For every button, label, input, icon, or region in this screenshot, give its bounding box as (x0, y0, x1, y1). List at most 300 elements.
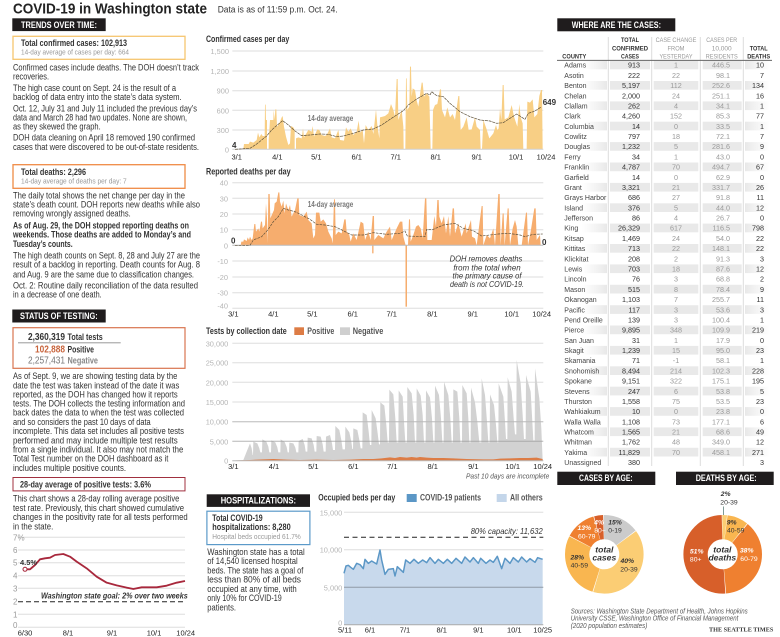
table: county data: 18 (672, 132, 680, 141)
table: county data: 75 (672, 397, 680, 406)
donut labels: cases: cases (592, 553, 616, 563)
table: county data: 4 (674, 214, 678, 223)
text: rate notes: in the state. (13, 521, 53, 531)
deaths bars (235, 192, 541, 307)
text: case notes: The high case count on Sept. 24 is the result of a (13, 83, 176, 93)
table: county data: 4,260 (622, 112, 640, 121)
table: county data: Stevens (564, 389, 590, 396)
chart title: Reported deaths per day (206, 166, 291, 176)
table: county data (557, 37, 772, 467)
text: testing notes: date the test was taken instead of the date it was (13, 380, 180, 390)
table: county data: 271 (752, 448, 764, 457)
table: county data: 494.7 (712, 163, 730, 172)
chart: reported deaths per day: 8/1 (427, 310, 438, 319)
chart: confirmed cases per day: 5/1 (311, 152, 322, 161)
chart: reported deaths per day: 0 (231, 236, 236, 246)
text: testing notes: from a single individual. It also may not match the (13, 444, 183, 454)
donut: cases by age (577, 527, 631, 581)
table: county data: 713 (628, 244, 640, 253)
table: county data: 54.0 (716, 234, 730, 243)
chart: reported deaths per day (206, 166, 551, 319)
table: county data: Thurston (564, 399, 592, 406)
chart: tests by collection date: 4/1 (269, 462, 279, 471)
table: county data: Grant (564, 185, 582, 192)
table: county data: 34 (632, 152, 640, 161)
table: county data: 31 (632, 336, 640, 345)
callout: total hospitalizations (207, 511, 310, 545)
table: county data: 458.1 (712, 448, 730, 457)
table: county data: 27 (672, 193, 680, 202)
table: county data: 26 (756, 183, 764, 192)
chart: tests by collection date: 25,000 (206, 359, 228, 368)
table: county data: 8,494 (622, 366, 640, 375)
chart: tests by collection date: 6/1 (348, 462, 359, 471)
table: county data: 12 (756, 203, 764, 212)
text: death notes: result of a backlog in reporting. Death counts for Aug. 8 (13, 260, 200, 270)
heading: cases by age: CASES BY AGE: (579, 473, 633, 484)
callout: 28-day average (13, 478, 185, 491)
donut labels: cases: 15% (608, 519, 622, 526)
text: hospital notes: occupied at any time, with (207, 584, 297, 594)
chart: reported deaths per day: 6/1 (347, 310, 358, 319)
chart title: Confirmed cases per day (206, 34, 289, 44)
table: county data: Adams (564, 63, 587, 70)
heading: hospitalizations: HOSPITALIZATIONS: (221, 496, 296, 506)
table: county data: Snohomish (564, 368, 599, 375)
panel: where are the cases (557, 18, 772, 467)
table: county data: 10 (756, 61, 764, 70)
table: county data: 219 (752, 326, 764, 335)
text: case notes: recoveries. (13, 72, 49, 82)
table: county data: 5,197 (622, 81, 640, 90)
chart: reported deaths per day: -30 (217, 289, 228, 298)
text: testing notes: reported, as the DOH has changed how it reports (13, 389, 178, 399)
table: county data: 34.1 (716, 102, 730, 110)
table: county data: 228 (752, 366, 764, 375)
table: county data: 134 (752, 81, 764, 90)
table: county data: 251.1 (712, 91, 730, 100)
chart: confirmed cases per day: 4 (232, 141, 237, 150)
table: county data: 0 (760, 214, 764, 223)
donut labels: deaths (690, 491, 758, 564)
table: county data: 33.5 (716, 122, 730, 131)
table: county data: Skagit (564, 348, 584, 355)
chart: tests by collection date: 10,000 (206, 418, 228, 427)
text: death notes: Oct. 2: Routine daily reconciliation of the data resulted (13, 280, 198, 290)
table: county data: 8 (674, 285, 678, 294)
table: county data: 1,558 (622, 397, 640, 406)
text: death notes: and Aug. 9 are the same due to classification changes. (13, 269, 194, 279)
table: county data: 7 (760, 132, 764, 141)
chart: tests by collection date (206, 326, 552, 481)
table: county data: 68.6 (716, 428, 730, 436)
callout: test totals: 2,360,319 (28, 332, 65, 343)
note: past 10 days: Past 10 days are incomplete (466, 472, 549, 481)
table: county data: 3 (760, 254, 764, 263)
data timestamp: Data is as of 11:59 p.m. Oct. 24. (218, 4, 338, 14)
table: county data: 22 (672, 71, 680, 80)
text: case notes: Oct. 12, July 31 and July 11 included the previous day’s (13, 104, 197, 114)
table: county data: 71 (632, 356, 640, 365)
panel: hospitalizations (207, 493, 552, 635)
table: county data: Pierce (564, 328, 584, 335)
chart: reported deaths per day: -20 (217, 273, 228, 282)
table: county data: 95.0 (716, 346, 730, 355)
callout: total hospitalizations: hospitalizations: 8,280 (212, 522, 291, 532)
table: county data: 102.3 (712, 366, 730, 375)
donut labels: cases (569, 519, 638, 574)
table: county data: 3 (674, 275, 678, 284)
table: county data: 148.1 (712, 244, 730, 253)
chart: tests by collection date: 20,000 (206, 378, 228, 387)
table: county data: 87.6 (716, 264, 730, 274)
table: county data: 3 (760, 305, 764, 314)
table: county data: Mason (564, 287, 585, 294)
chart: tests by collection date: 5,000 (210, 437, 228, 446)
text: testing notes: Total Test number on the DOH dashboard as it (13, 454, 169, 464)
table: county data: 26,329 (618, 224, 640, 233)
table: county data: Cowlitz (564, 134, 587, 141)
callout: total hospitalizations: Total COVID-19 (212, 513, 263, 523)
text: hospital notes (207, 547, 305, 612)
table: county data: 12 (756, 264, 764, 274)
chart: positive test rate: 2 (13, 598, 18, 607)
text: death notes: The high death counts on Sept. 8, 28 and July 27 are the (13, 250, 200, 260)
table: county data: Pend Oreille (564, 318, 603, 324)
text: rate notes: This chart shows a 28-day rolling average positive (13, 494, 179, 504)
table: county data: 255.7 (712, 295, 730, 304)
table: county data: 11,829 (619, 448, 640, 457)
legend: Positive (307, 326, 334, 336)
table: county data: 4,787 (622, 163, 640, 172)
14-day average line (235, 92, 541, 149)
chart: confirmed cases per day (206, 34, 557, 161)
chart: occupied beds per day: 0 (338, 618, 342, 628)
chart: occupied beds per day: 5,000 (324, 583, 342, 592)
table: county data: 24 (672, 234, 680, 243)
text: hospital notes: Washington state has a total (207, 547, 305, 557)
chart: confirmed cases per day: 14-day average (308, 114, 354, 123)
chart: confirmed cases per day: 3/1 (231, 152, 242, 161)
chart: positive test rate: 3 (13, 584, 18, 593)
text: case notes: cases that were discovered to be out-of-state residents. (13, 142, 199, 152)
chart: positive test rate: 4 (13, 572, 18, 581)
text: testing notes: back dates the data to when the test was collected (13, 408, 184, 418)
table: county data: 23.8 (716, 407, 730, 416)
table: county data: Island (564, 205, 583, 212)
table: county data: 7 (760, 71, 764, 80)
legend: Negative (353, 326, 383, 336)
table: county data: 22 (672, 244, 680, 253)
callout: 28-day average: 3.6% (134, 479, 151, 490)
donut labels: deaths: 9% (727, 519, 737, 526)
table: county data: 322 (670, 377, 682, 386)
table: county data: 2 (674, 254, 678, 263)
chart: confirmed cases per day: 1,500 (210, 47, 229, 56)
table: county data: 380 (628, 458, 640, 467)
table: county data: Whatcom (564, 430, 594, 436)
table: county data: Lewis (564, 266, 583, 274)
table: county data: 53.8 (716, 387, 730, 396)
donut labels: deaths: 60-79 (740, 556, 758, 563)
chart: reported deaths per day: 30 (220, 194, 228, 203)
donut labels: deaths: 80+ (690, 557, 701, 564)
donut labels: cases: 28% (569, 554, 584, 561)
text: death notes (12, 191, 200, 299)
table: county data: 10 (632, 407, 640, 416)
table: county data: 7 (674, 295, 678, 304)
table: county data: 77 (756, 112, 764, 121)
chart: tests by collection date: 8/1 (427, 462, 438, 471)
donut labels: cases: 40-59 (571, 562, 588, 569)
table: county data: FROM (668, 46, 684, 52)
table: county data: 72.1 (716, 132, 730, 141)
table: county data: DEATHS (747, 54, 771, 60)
table: county data: 0 (760, 152, 764, 161)
table: county data: 100.4 (712, 316, 730, 324)
table: county data: 376 (628, 203, 640, 212)
chart: positive test rate: 5 (13, 559, 18, 568)
text: testing notes: tests. The DOH collects the testing information and (13, 399, 185, 409)
table: county data: CONFIRMED (612, 46, 648, 52)
table: county data: Chelan (564, 93, 587, 100)
table: county data: 0 (674, 122, 678, 131)
table: county data: 1,565 (622, 428, 640, 436)
table: county data: 798 (752, 224, 764, 233)
chart: reported deaths per day: 0 (224, 241, 228, 250)
table: county data: Ferry (564, 154, 581, 161)
donut labels: deaths: total (713, 544, 732, 554)
donut labels: cases: 0-19 (608, 528, 622, 535)
table: county data: Whitman (564, 440, 592, 447)
text: testing notes (13, 371, 185, 473)
table: county data: Clallam (564, 104, 588, 110)
chart: reported deaths per day: 40 (220, 179, 228, 188)
chart: positive test rate: 7% (13, 533, 25, 542)
table: county data: Okanogan (564, 297, 597, 304)
negative tests bars (232, 360, 543, 461)
table: county data: 23 (756, 346, 764, 355)
table: county data: Douglas (564, 144, 590, 151)
table: county data: San Juan (564, 338, 594, 345)
panel: status of testing (12, 310, 195, 637)
table: county data: 222 (628, 71, 640, 80)
table: county data: Spokane (564, 379, 592, 386)
chart: confirmed cases per day: 7/1 (390, 152, 401, 161)
table: county data: 76 (632, 275, 640, 284)
panel: trends over time (12, 18, 200, 299)
chart: positive test rate: 1 (13, 610, 18, 619)
table: county data: 6 (760, 417, 764, 426)
table: county data: 112 (670, 81, 682, 90)
table: county data: 446.5 (712, 61, 730, 70)
donut labels: deaths: 2% (720, 491, 731, 498)
table: county data: 1 (674, 152, 678, 161)
table: county data: 177.1 (712, 417, 730, 426)
table: county data: TOTAL (750, 46, 768, 52)
chart: occupied beds per day: 15,000 (320, 508, 342, 517)
table: county data: Skamania (564, 358, 596, 365)
table: county data: 0 (674, 173, 678, 182)
donut: deaths by age (696, 527, 750, 581)
text: case notes: Confirmed cases include deaths. The DOH doesn’t track (13, 62, 199, 72)
chart: tests by collection date: 3/1 (228, 462, 239, 471)
heading: where are the cases (557, 18, 675, 31)
text: rate notes: test rate. Previously, this chart showed cumulative (13, 503, 184, 513)
table: county data: 14 (632, 122, 640, 131)
table: county data: 703 (628, 264, 640, 274)
table: county data: COUNTY (562, 54, 587, 60)
table: county data: 85.3 (716, 112, 730, 121)
table: county data: RESIDENTS (706, 54, 738, 60)
legend: All others (510, 493, 543, 503)
text: death notes: weekends. Those deaths are added to Monday’s and (12, 230, 191, 240)
table: county data: 0 (760, 407, 764, 416)
callout: test totals: Positive (68, 345, 94, 355)
chart: positive test rate: 0 (13, 621, 18, 630)
table: county data: 2 (760, 275, 764, 284)
text: hospital notes: beds. The state has a goal of (207, 565, 304, 575)
chart: tests by collection date: 30,000 (206, 339, 228, 348)
table: county data: 617 (670, 224, 682, 233)
chart: occupied beds per day (318, 493, 552, 635)
table: county data: 152 (670, 112, 682, 121)
table: county data: 70 (672, 448, 680, 457)
text: case notes: data and March 28 had two updates. None are shown, (13, 113, 187, 123)
table: county data: 70 (672, 163, 680, 172)
table: county data: YESTERDAY (660, 54, 693, 60)
table: county data: CASES (621, 54, 639, 60)
table: county data: 1 (674, 61, 678, 70)
table: county data: CASES PER (706, 37, 737, 44)
table: county data: 11 (757, 193, 764, 202)
text: case notes: DOH data cleaning on April 18 removed 190 confirmed (13, 133, 195, 143)
table: county data: 6 (674, 387, 678, 396)
table: county data: 21 (672, 183, 680, 192)
table: county data: 117 (629, 305, 640, 314)
chart: confirmed cases per day: 10/24 (537, 152, 555, 161)
donut labels: cases: 60-79 (578, 533, 596, 540)
chart: occupied beds per day: 7/1 (400, 626, 410, 635)
table: county data: 9,151 (622, 377, 640, 386)
table: county data: Benton (564, 83, 587, 90)
table: county data: 1 (760, 356, 764, 365)
annotation: death is not COVID-19. (450, 279, 524, 289)
positive tests bars (232, 457, 543, 461)
table: county data: 247 (628, 387, 640, 396)
chart: occupied beds per day: 10/25 (533, 626, 552, 635)
callout: total deaths (13, 165, 185, 188)
table: county data: 16 (756, 91, 764, 100)
table: county data: 49 (756, 428, 764, 436)
chart: confirmed cases per day: 8/1 (430, 152, 441, 161)
table: county data: 252.6 (712, 81, 730, 90)
text: testing notes: and so considers the past 10 days of data (13, 417, 151, 427)
chart: positive test rate: 4.5% (20, 558, 37, 567)
legend (294, 326, 383, 336)
donut labels: cases: 80+ (594, 528, 606, 535)
table: county data: 10,000 (712, 46, 732, 52)
table: county data: 67 (756, 163, 764, 172)
table: county data: Klickitat (564, 256, 588, 263)
text: hospital notes: less than 80% of all beds (207, 575, 301, 585)
table: county data: Garfield (564, 175, 589, 182)
table: county data: 78.4 (716, 285, 730, 294)
heading: status of testing: STATUS OF TESTING: (20, 311, 98, 322)
table: county data: 1,108 (622, 417, 640, 426)
cases bars (235, 67, 543, 149)
callout: total confirmed cases: 14-day average of cases per day: 664 (21, 48, 129, 56)
table: county data: Kitsap (564, 236, 584, 243)
callout: total deaths: 14-day average of deaths per day: 7 (21, 177, 127, 186)
table: county data: 9 (760, 142, 764, 151)
table: county data: 0 (674, 407, 678, 416)
table: county data: 53.5 (716, 397, 730, 406)
table: county data: 98.1 (716, 71, 730, 80)
chart: confirmed cases per day: 600 (217, 106, 229, 115)
table: county data: 349.0 (712, 438, 730, 447)
chart: occupied beds per day: 80% capacity: 11,632 (471, 526, 543, 536)
table: county data: 22 (756, 244, 764, 253)
table: county data: Unassigned (564, 460, 601, 467)
text: death notes: The daily total shows the net change per day in the (13, 191, 185, 201)
heading: where are the cases: WHERE ARE THE CASES: (572, 20, 661, 31)
table: county data: 17.9 (716, 336, 730, 345)
table: county data: 1,239 (622, 346, 640, 355)
chart: reported deaths per day: 4/1 (268, 310, 279, 319)
chart: occupied beds per day: 9/1 (473, 626, 484, 635)
text: hospital notes: of 14,540 licensed hospital (207, 556, 298, 566)
text: death notes: state’s death count. DOH reports new deaths while also (13, 200, 200, 210)
text: hospital notes: patients. (207, 602, 236, 612)
donut labels: cases: 13% (577, 525, 591, 532)
text: testing notes: incomplete. This data set includes all positive tests (13, 426, 184, 436)
sources: University CSSE, Washington Office of Financial Management (571, 614, 739, 623)
annotation: DOH removes deaths (450, 254, 523, 264)
heading: trends over time (12, 18, 106, 31)
table: county data: 5 (674, 203, 678, 212)
text: testing notes: includes multiple positive counts. (13, 463, 126, 473)
table: county data: 208 (628, 254, 640, 263)
annotation: from the total when (453, 262, 521, 272)
chart: confirmed cases per day: 4/1 (272, 152, 283, 161)
text: hospital notes: only 10% for COVID-19 (207, 593, 282, 603)
donut labels: cases: 20-39 (620, 567, 638, 574)
chart: reported deaths per day: 5/1 (307, 310, 318, 319)
table: county data: 91.8 (716, 193, 730, 202)
table: county data: 43.0 (716, 152, 730, 161)
table: county data: 175.1 (712, 377, 730, 386)
table: county data: Walla Walla (564, 419, 601, 426)
chart: occupied beds per day: 10,000 (320, 546, 342, 555)
table: county data: 11 (757, 295, 764, 304)
chart: reported deaths per day: 7/1 (386, 310, 397, 319)
beds area (344, 550, 543, 625)
callout: test totals: Negative (68, 356, 98, 366)
table: county data: -1 (673, 356, 679, 365)
table: county data: 515 (628, 285, 640, 294)
table: county data: 116.5 (713, 224, 730, 233)
table: county data: 913 (628, 61, 640, 70)
heading: trends over time: TRENDS OVER TIME: (21, 20, 97, 31)
callout: total confirmed cases: Total confirmed cases: 102,913 (21, 38, 127, 48)
chart: occupied beds per day: 10/1 (507, 626, 522, 635)
chart title: Tests by collection date (206, 326, 287, 336)
table: county data: 1 (760, 102, 764, 110)
table: county data: 48 (672, 438, 680, 447)
table: county data: 1 (760, 122, 764, 131)
table: county data: 9,895 (622, 326, 640, 335)
